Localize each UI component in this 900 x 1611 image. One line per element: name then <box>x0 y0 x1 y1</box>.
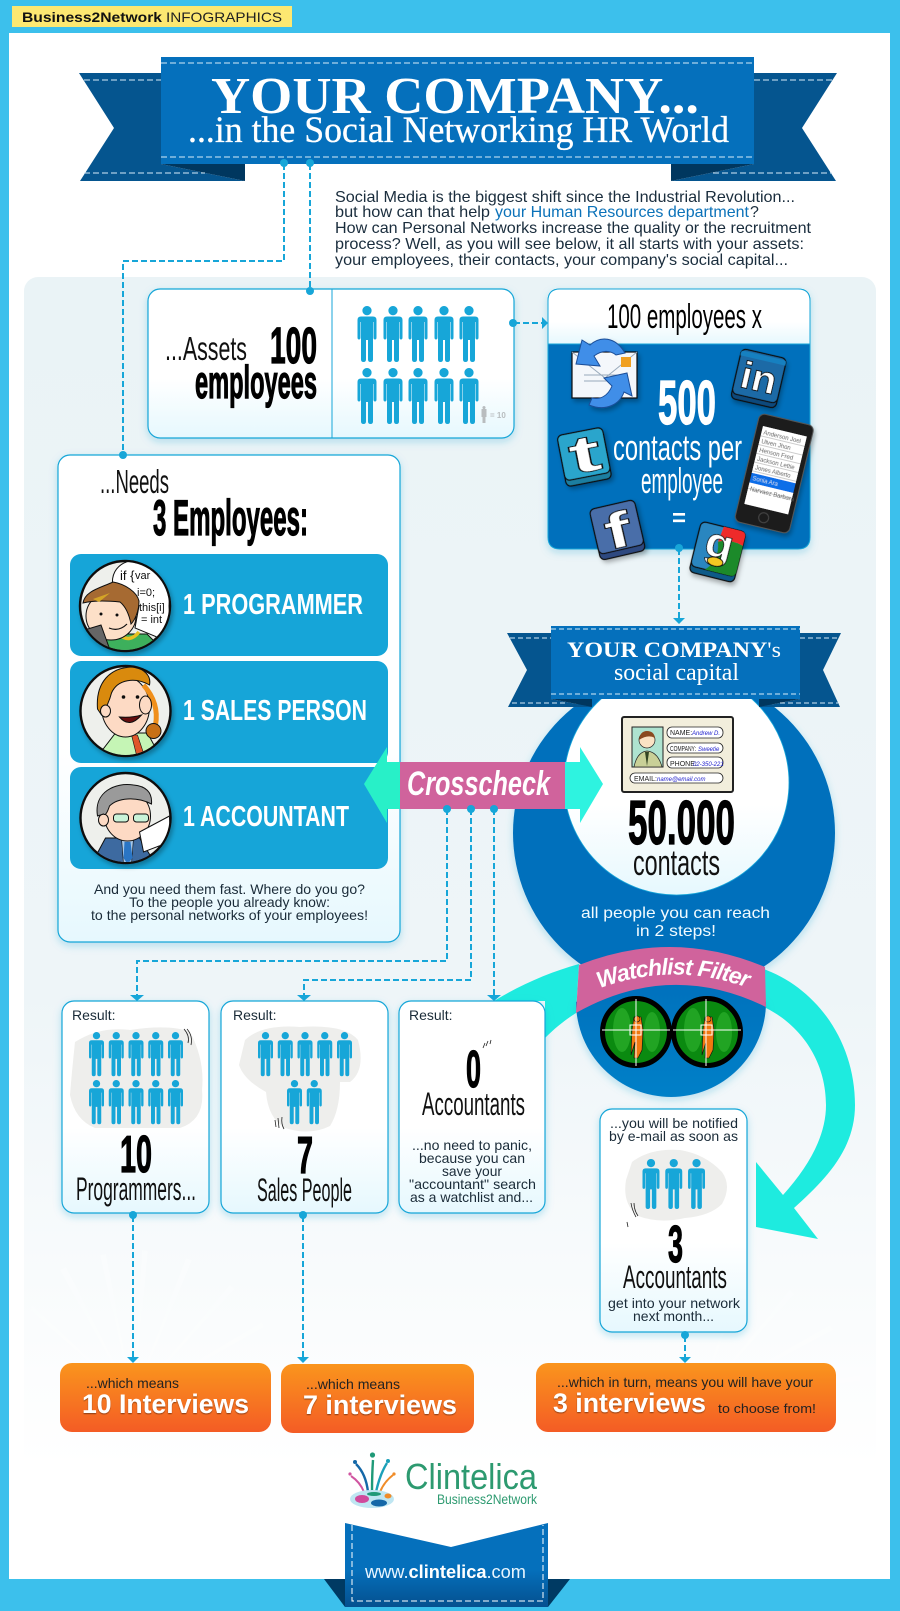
icon: logo fountain <box>348 1452 396 1508</box>
id card icon: Andrew D. <box>691 731 720 737</box>
intro paragraph <box>335 189 812 269</box>
count 7: 7 <box>297 1127 313 1185</box>
panel: 500 contacts per employee <box>548 289 814 583</box>
notification text <box>609 1115 738 1144</box>
employees label: employees <box>195 356 317 408</box>
icon: phone with contact list: Jones Alberto <box>754 465 792 480</box>
icon: phone with contact list: Ulven Jhon <box>761 439 791 452</box>
explanation text: because you can <box>419 1150 525 1166</box>
next month text: next month... <box>633 1308 714 1324</box>
row: programmer <box>70 554 388 656</box>
callout: 10 interviews: 10 Interviews <box>82 1389 249 1419</box>
callout: 10 interviews: ...which means <box>86 1375 179 1391</box>
callout: 10 interviews <box>60 1363 271 1432</box>
id card icon: PHONE: <box>670 761 697 768</box>
watchlist left flow band <box>494 964 579 1038</box>
banner right tail <box>671 73 837 181</box>
intro paragraph: ? <box>750 204 759 221</box>
banner heading: YOUR COMPANY 's <box>567 637 781 662</box>
icon: google: g <box>700 518 739 570</box>
contacts label: contacts <box>633 842 720 883</box>
title banner <box>79 57 837 181</box>
title text: YOUR COMPANY... <box>211 68 699 125</box>
count 10: 10 <box>120 1126 152 1184</box>
callout: 7 interviews: ...which means <box>306 1376 400 1392</box>
blob with figures <box>239 1027 361 1132</box>
assets label: ...Assets <box>165 330 247 367</box>
crosscheck arrows and label <box>364 747 603 823</box>
icon: programmer cartoon <box>80 560 170 652</box>
intro paragraph: your Human Resources department <box>495 204 750 221</box>
panel: result programmers <box>62 1001 209 1213</box>
banner subheading: social capital <box>614 660 739 686</box>
icon: phone with contact list: Anderson Joel <box>763 430 801 445</box>
count 3: 3 <box>668 1216 683 1274</box>
crosscheck text: Crosscheck <box>407 765 552 803</box>
next month text: get into your network <box>608 1295 741 1311</box>
panel: needs 3 employees <box>58 455 400 942</box>
id card icon: name@email.com <box>657 777 705 783</box>
icon: linkedin: in <box>736 354 781 403</box>
crosscheck band <box>400 762 565 809</box>
arrow: right to contacts <box>565 747 603 823</box>
callout: 3 interviews: 3 interviews <box>553 1388 706 1418</box>
multiplier heading: 100 employees x <box>607 298 762 336</box>
inner white circle <box>564 670 789 895</box>
icon: linkedin <box>731 348 787 408</box>
row: accountant <box>70 767 388 869</box>
icon: programmer cartoon: = int <box>141 614 162 626</box>
intro paragraph: How can Personal Networks increase the quality or the recruitment <box>335 220 812 237</box>
accountants label: Accountants <box>623 1259 727 1295</box>
id card icon: NAME: <box>670 730 692 737</box>
panel: result programmers: Result: <box>72 1007 116 1023</box>
count 50.000: 50.000 <box>628 789 735 858</box>
notification text: ...you will be notified <box>610 1115 738 1131</box>
reach caption <box>581 905 770 940</box>
header tag: INFOGRAPHICS <box>166 9 282 25</box>
icon: binoculars <box>602 998 741 1066</box>
panel: result sales people: Result: <box>233 1007 277 1023</box>
pale content panel <box>24 277 876 1467</box>
callout: 3 interviews: to choose from! <box>718 1401 816 1416</box>
reach caption: in 2 steps! <box>636 923 716 940</box>
icon: sales person cartoon <box>80 666 170 759</box>
curved arrow: watchlist to notification <box>756 967 855 1239</box>
watchlist filter <box>572 947 770 1104</box>
needs caption: to the personal networks of your employees! <box>91 907 368 923</box>
logo wordmark: Clintelica <box>405 1456 538 1497</box>
subtitle text: ...in the Social Networking HR World <box>188 110 729 151</box>
crosscheck connectors <box>130 809 501 1001</box>
website url: www.clintelica.com <box>364 1562 526 1582</box>
contacts per label: contacts per <box>613 427 742 468</box>
connectors to interviews <box>127 1211 691 1363</box>
count 100: 100 <box>270 317 317 374</box>
arrow: left to needs <box>364 747 400 823</box>
decorative sunburst rays <box>30 1250 875 1530</box>
panel: result sales people <box>221 1001 388 1213</box>
callout: 3 interviews: ...which in turn, means you will have your <box>557 1374 813 1390</box>
icon: employee figures <box>358 306 478 424</box>
logo <box>348 1452 538 1508</box>
panel: notified accountants <box>600 1109 747 1332</box>
blob with figures <box>625 1150 727 1227</box>
arrow: assets to contacts <box>514 317 548 329</box>
icon: google <box>689 515 748 583</box>
count 500: 500 <box>658 369 716 438</box>
icon: facebook: f <box>599 501 637 561</box>
callout: 3 interviews <box>536 1363 836 1432</box>
needs caption: And you need them fast. Where do you go? <box>94 881 365 897</box>
id card icon: Sweetie <box>698 747 720 753</box>
needs caption <box>91 881 368 923</box>
blob with figures <box>70 1027 202 1128</box>
intro paragraph: your employees, their contacts, your company's social capital... <box>335 252 788 269</box>
header tag <box>12 6 292 27</box>
icon: phone with contact list: Henson Fred <box>758 448 794 462</box>
panel: result accountants: Result: <box>409 1007 453 1023</box>
callout: 7 interviews: 7 interviews <box>303 1390 457 1420</box>
id card icon: EMAIL: <box>634 776 657 783</box>
logo tagline: Business2Network <box>437 1491 538 1507</box>
intro paragraph: process? Well, as you will see below, it all starts with your assets: <box>335 236 804 253</box>
id card icon <box>622 717 733 792</box>
legend: one figure equals ten <box>482 406 506 423</box>
intro paragraph: but how can that help <box>335 204 490 221</box>
social capital circle <box>513 670 835 994</box>
icon: phone with contact list <box>734 413 814 534</box>
icon: twitter <box>556 422 612 488</box>
icon: mail <box>572 339 637 408</box>
count 0: 0 <box>466 1041 481 1099</box>
icon: programmer cartoon: i=0; <box>137 587 155 599</box>
header tag: Business2Network <box>22 9 162 25</box>
id card icon: COMPANY: <box>670 746 696 753</box>
explanation text <box>409 1137 536 1205</box>
icon: programmer cartoon: if { <box>120 568 135 583</box>
row: programmer: 1 PROGRAMMER <box>183 589 363 621</box>
intro paragraph: Social Media is the biggest shift since the Industrial Revolution... <box>335 189 795 206</box>
watchlist text: Watchlist Filter <box>596 958 752 988</box>
reach caption: all people you can reach <box>581 905 770 922</box>
row: sales person <box>70 661 388 763</box>
accountants label: Accountants <box>422 1086 525 1122</box>
icon: phone with contact list: Narvaez Barbara <box>749 487 795 503</box>
explanation text: "accountant" search <box>409 1176 536 1192</box>
id card icon: 02-350-221 <box>693 762 724 768</box>
programmers label: Programmers... <box>76 1171 196 1207</box>
explanation text: as a watchlist and... <box>410 1189 533 1205</box>
icon: phone with contact list: Jackson Lettie <box>756 457 796 472</box>
icon: programmer cartoon: this[i] <box>139 602 165 614</box>
explanation text: ...no need to panic, <box>412 1137 532 1153</box>
row: accountant: 1 ACCOUNTANT <box>183 801 349 833</box>
panel: assets 100 employees <box>148 289 514 438</box>
watchlist circle lower half <box>576 976 766 1097</box>
row: sales person: 1 SALES PERSON <box>183 695 367 727</box>
banner left tail <box>79 73 245 181</box>
legend: one figure equals ten: = 10 <box>490 411 506 420</box>
needs label: ...Needs <box>100 463 169 500</box>
callout: 7 interviews <box>281 1364 474 1433</box>
employee label: employee <box>641 460 723 501</box>
sales people label: Sales People <box>257 1172 352 1208</box>
watchlist pink band <box>576 947 766 1013</box>
arrow: contacts to social capital <box>673 544 685 624</box>
connector end dots on boxes <box>119 287 517 459</box>
icon: twitter: t <box>564 423 606 486</box>
equals sign: = <box>672 505 686 532</box>
icon: programmer cartoon: var <box>135 570 151 582</box>
icon: facebook <box>589 498 646 563</box>
icon: phone with contact list: Sonia Ara <box>752 476 779 488</box>
needs caption: To the people you already know: <box>129 894 330 910</box>
explanation text: save your <box>442 1163 502 1179</box>
panel: needs 3 employees: 3 Employees: <box>153 490 308 546</box>
social capital banner <box>507 626 841 707</box>
panel: result accountants <box>399 1001 545 1213</box>
next month text <box>608 1295 741 1324</box>
crosscheck connector dots <box>443 805 498 813</box>
connectors from title banner <box>123 159 314 455</box>
footer ribbon <box>324 1523 570 1607</box>
icon: accountant cartoon <box>80 773 170 864</box>
notification text: by e-mail as soon as <box>609 1128 738 1144</box>
